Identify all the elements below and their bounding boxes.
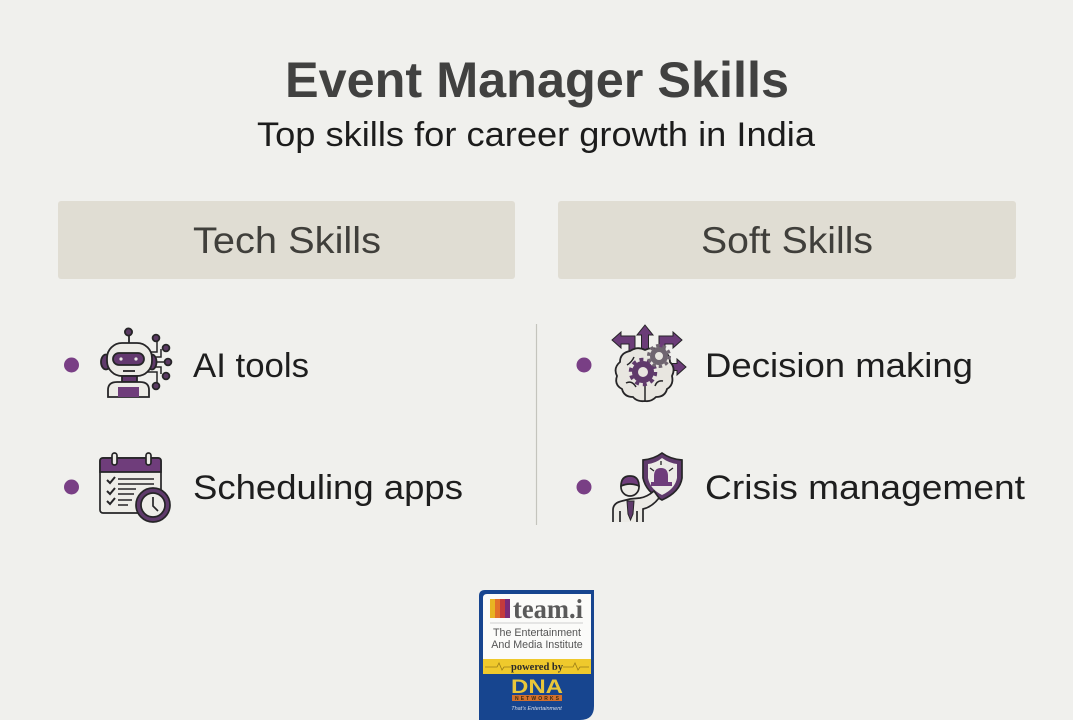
label: AI tools — [193, 347, 309, 385]
powered by band: powered by — [511, 662, 564, 673]
icon: brain with gears and arrows — [612, 325, 686, 401]
label: Crisis management — [705, 469, 1026, 507]
icon: calendar with clock — [100, 453, 170, 522]
logo: team.i badge — [479, 590, 594, 720]
DNA logo: That's Entertainment — [511, 706, 562, 712]
panel: soft skills heading: Soft Skills — [701, 220, 873, 261]
label: Decision making — [705, 347, 973, 385]
DNA logo — [511, 677, 563, 712]
column divider — [536, 324, 538, 525]
bullet — [576, 480, 592, 494]
logo: team.i badge: And Media Institute — [491, 639, 583, 651]
bullet — [576, 358, 592, 372]
logo mark — [490, 599, 510, 618]
list item: AI tools — [64, 328, 309, 397]
subtitle: Top skills for career growth in India — [257, 116, 815, 154]
panel: soft skills heading — [558, 201, 1016, 279]
title: Event Manager Skills — [285, 52, 789, 108]
list item: Scheduling apps — [64, 453, 463, 522]
DNA logo: NETWORKS — [515, 696, 560, 702]
bullet — [64, 358, 79, 372]
logo wordmark: team.i — [513, 594, 583, 624]
icon: robot — [101, 328, 171, 397]
DNA logo: DNA — [511, 677, 563, 698]
icon: person with alarm shield — [613, 453, 682, 522]
logo tagline: The Entertainment — [493, 627, 581, 639]
panel: tech skills heading: Tech Skills — [193, 220, 381, 261]
list item: Decision making — [576, 325, 973, 401]
panel: tech skills heading — [58, 201, 515, 279]
bullet — [64, 480, 79, 494]
label: Scheduling apps — [193, 469, 463, 507]
list item: Crisis management — [576, 453, 1026, 522]
